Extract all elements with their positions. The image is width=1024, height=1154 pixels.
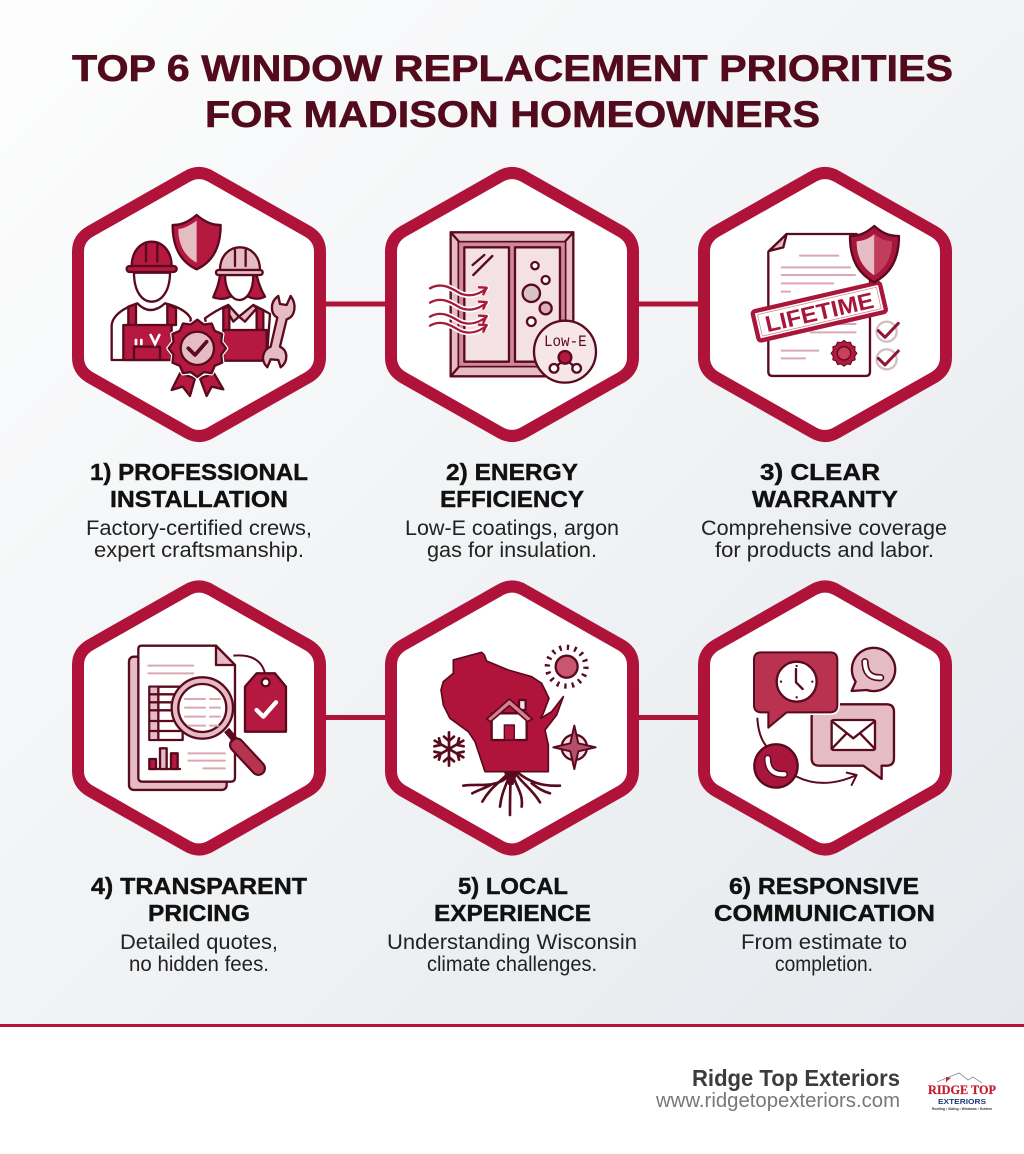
icon: crew with shield, badge and wrench: [112, 215, 295, 396]
icon: lifetime warranty document: [752, 226, 899, 376]
description 3: [701, 517, 947, 562]
logo: EXTERIORS: [938, 1097, 986, 1106]
description 3: for products and labor.: [715, 539, 934, 562]
description 1: expert craftsmanship.: [94, 539, 304, 562]
panel: clear warranty: [701, 173, 947, 562]
title: FOR MADISON HOMEOWNERS: [205, 94, 820, 135]
description 4: [120, 931, 278, 976]
description 6: From estimate to: [741, 931, 907, 954]
description 1: [86, 517, 312, 562]
heading 2: [440, 459, 584, 512]
icon: window with low-e coating: Low-E: [544, 333, 587, 351]
logo: [928, 1073, 996, 1111]
description 5: climate challenges.: [427, 953, 597, 976]
heading 2: EFFICIENCY: [440, 486, 584, 512]
heading 3: [752, 459, 898, 512]
description 5: Understanding Wisconsin: [387, 931, 637, 954]
title: TOP 6 WINDOW REPLACEMENT PRIORITIES: [72, 48, 953, 89]
icon: wisconsin map with house and roots: [434, 647, 596, 815]
logo: RIDGE TOP: [928, 1082, 996, 1097]
panel: transparent pricing: [78, 586, 320, 976]
title: [72, 48, 953, 135]
heading 3: WARRANTY: [752, 486, 898, 512]
hexagon 3: [704, 173, 946, 436]
company name: Ridge Top Exteriors: [692, 1065, 900, 1091]
hexagon 2: [391, 173, 633, 436]
description 5: [387, 931, 637, 976]
heading 5: 5) LOCAL: [458, 873, 568, 899]
icon: window with low-e coating: [430, 232, 596, 383]
panel: local experience: [387, 586, 637, 976]
heading 4: 4) TRANSPARENT: [91, 873, 308, 899]
icon: communication bubbles: [754, 648, 895, 788]
heading 5: EXPERIENCE: [434, 900, 591, 926]
heading 6: COMMUNICATION: [714, 900, 935, 926]
heading 4: PRICING: [148, 900, 250, 926]
description 2: [405, 517, 619, 562]
footer band: [0, 1024, 1024, 1154]
heading 2: 2) ENERGY: [446, 459, 578, 485]
heading 3: 3) CLEAR: [760, 459, 880, 485]
description 4: Detailed quotes,: [120, 931, 278, 954]
heading 1: 1) PROFESSIONAL: [90, 459, 308, 485]
description 6: completion.: [775, 953, 873, 976]
website: www.ridgetopexteriors.com: [655, 1090, 900, 1112]
heading 1: [90, 459, 308, 512]
description 1: Factory-certified crews,: [86, 517, 312, 540]
description 2: gas for insulation.: [427, 539, 597, 562]
hexagon 6: [704, 586, 946, 850]
description 4: no hidden fees.: [129, 953, 269, 976]
hexagon 4: [78, 586, 320, 850]
description 6: [741, 931, 907, 976]
panel: energy efficiency: [391, 173, 633, 562]
description 2: Low-E coatings, argon: [405, 517, 619, 540]
icon: quote document with magnifier and price tag: [129, 646, 286, 790]
heading 5: [434, 873, 591, 926]
panel: responsive communication: [704, 586, 946, 976]
hexagon 5: [391, 586, 633, 850]
hexagon 1: [78, 173, 320, 436]
panel: professional installation: [78, 173, 320, 562]
description 3: Comprehensive coverage: [701, 517, 947, 540]
heading 1: INSTALLATION: [110, 486, 288, 512]
heading 6: 6) RESPONSIVE: [729, 873, 919, 899]
heading 4: [91, 873, 308, 926]
icon: lifetime warranty document: LIFETIME: [763, 287, 876, 337]
logo: Roofing • Siding • Windows • Gutters: [932, 1107, 992, 1111]
heading 6: [714, 873, 935, 926]
connectors: [320, 302, 703, 720]
